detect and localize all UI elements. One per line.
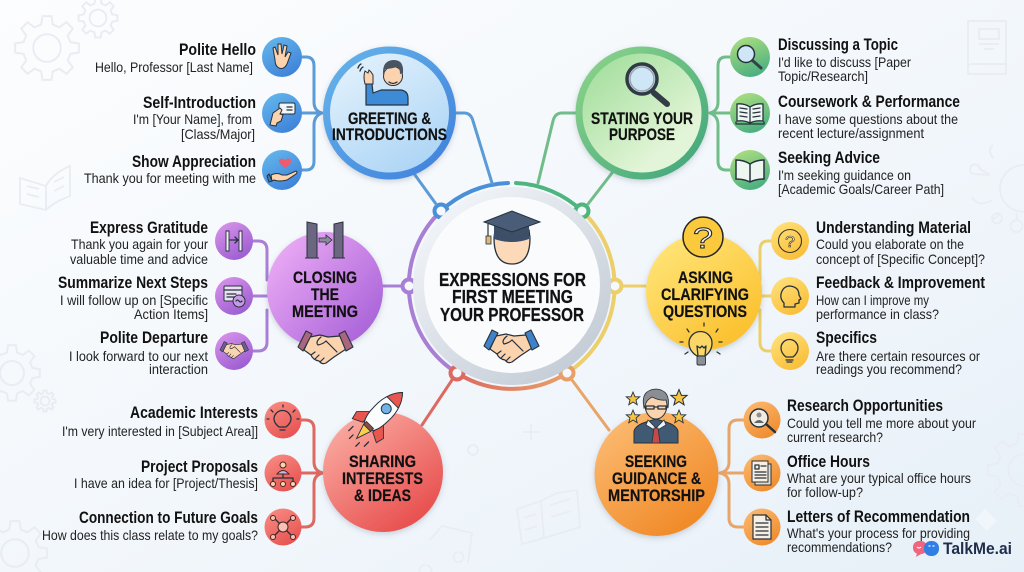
- item: understanding material: concept of [Specific Concept]?: [816, 251, 985, 267]
- item: specifics: readings you recommend?: [816, 361, 962, 377]
- item: feedback and improvement: How can I improve my: [816, 292, 929, 308]
- item: office hours: Office Hours: [787, 453, 870, 471]
- main circle: [646, 234, 762, 350]
- title: CLARIFYING: [661, 286, 749, 304]
- item: specifics: Are there certain resources or: [816, 348, 980, 364]
- item: research opportunities: current research?: [787, 429, 883, 445]
- item: letters of recommendation: What's your process for providing: [787, 525, 970, 541]
- item: project proposals: [74, 454, 302, 492]
- item: office hours: [744, 453, 971, 500]
- item: polite departure: I look forward to our next: [69, 348, 208, 364]
- item: self-introduction: I'm [Your Name], from: [133, 111, 252, 127]
- item: project proposals: I have an idea for [Project/Thesis]: [74, 475, 258, 491]
- connectors: [623, 241, 771, 351]
- item: express gratitude: Express Gratitude: [90, 219, 208, 237]
- item: feedback and improvement: performance in class?: [816, 306, 939, 322]
- item: academic interests: I'm very interested in [Subject Area]]: [62, 423, 258, 439]
- item: understanding material: Could you elaborate on the: [816, 236, 964, 252]
- item: show appreciation: Show Appreciation: [132, 153, 256, 171]
- main circle: [326, 50, 452, 176]
- item: seeking advice: [Academic Goals/Career Path]: [778, 181, 944, 197]
- item: office hours: What are your typical office hours: [787, 470, 971, 486]
- logo: TalkMe.ai: TalkMe.ai: [943, 539, 1012, 558]
- main circle: [323, 412, 443, 532]
- main circle: [579, 50, 705, 176]
- item: coursework and performance: I have some questions about the: [778, 111, 958, 127]
- item: coursework and performance: [730, 93, 960, 141]
- title: [608, 453, 705, 505]
- main circle: [267, 232, 383, 348]
- item: discussing a topic: Discussing a Topic: [778, 36, 898, 54]
- connectors: [253, 241, 401, 351]
- item: discussing a topic: Topic/Research]: [778, 68, 868, 84]
- item: academic interests: Academic Interests: [130, 404, 258, 422]
- title: [332, 110, 447, 144]
- item: office hours: for follow-up?: [787, 484, 863, 500]
- icon: rocket: [339, 379, 416, 456]
- item: connection to future goals: How does this class relate to my goals?: [42, 527, 258, 543]
- item: letters of recommendation: [744, 508, 970, 555]
- icon: question mark: [683, 217, 723, 257]
- connectors: [572, 380, 743, 527]
- item: express gratitude: valuable time and advice: [70, 251, 208, 267]
- item: self-introduction: [133, 93, 302, 142]
- item: discussing a topic: I'd like to discuss [Paper: [778, 54, 911, 70]
- item: polite departure: Polite Departure: [100, 329, 208, 347]
- item: feedback and improvement: Feedback & Improvement: [816, 274, 985, 292]
- item: polite hello: Hello, Professor [Last Name]: [95, 59, 253, 75]
- title: MENTORSHIP: [608, 487, 705, 505]
- item: discussing a topic: [730, 36, 911, 84]
- title: QUESTIONS: [663, 303, 747, 321]
- title: THE: [311, 286, 339, 304]
- item: understanding material: Understanding Material: [816, 219, 971, 237]
- main circle: [594, 412, 718, 536]
- hub title: YOUR PROFESSOR: [440, 305, 584, 325]
- item: connection to future goals: [42, 508, 302, 546]
- panel: asking clarifying questions: [623, 217, 985, 377]
- central ring with six nodes: [402, 183, 622, 389]
- panel: greeting and introductions: [84, 37, 492, 204]
- icon: graduate with cap: [484, 211, 540, 264]
- item: academic interests: [62, 402, 302, 439]
- title: & IDEAS: [354, 487, 411, 505]
- title: SEEKING: [625, 453, 687, 471]
- title: CLOSING: [293, 269, 357, 287]
- icon: doors and arrow: [305, 222, 345, 258]
- title: ASKING: [678, 269, 733, 287]
- title: SHARING: [349, 453, 416, 471]
- item: show appreciation: [84, 150, 302, 190]
- title: GREETING &: [348, 110, 431, 128]
- title: [342, 453, 423, 505]
- title: MEETING: [292, 303, 358, 321]
- item: seeking advice: [730, 149, 944, 197]
- item: coursework and performance: recent lecture/assignment: [778, 125, 924, 141]
- item: understanding material: [771, 219, 985, 267]
- item: research opportunities: Could you tell me more about your: [787, 415, 976, 431]
- item: connection to future goals: Connection to Future Goals: [79, 509, 258, 527]
- title: [292, 269, 358, 321]
- item: summarize next steps: Summarize Next Steps: [58, 274, 208, 292]
- item: polite hello: Polite Hello: [179, 41, 256, 59]
- item: specifics: [771, 329, 980, 377]
- item: self-introduction: [Class/Major]: [181, 126, 255, 142]
- logo: TalkMe.ai: [913, 509, 1012, 558]
- icon: magnifying glass: [627, 64, 667, 104]
- connectors: [302, 57, 492, 204]
- hub title: EXPRESSIONS FOR: [439, 270, 586, 290]
- title: [591, 110, 693, 144]
- title: INTRODUCTIONS: [332, 126, 447, 144]
- item: letters of recommendation: Letters of Recommendation: [787, 508, 970, 526]
- icon: question mark: ?: [693, 223, 713, 255]
- item: coursework and performance: Coursework & Performance: [778, 93, 960, 111]
- icon: light bulb: [680, 323, 722, 365]
- hub title: [439, 270, 586, 325]
- item: research opportunities: [744, 397, 976, 445]
- item: summarize next steps: [58, 274, 253, 322]
- icon: person waving: [358, 60, 408, 105]
- item: seeking advice: Seeking Advice: [778, 149, 880, 167]
- panel: sharing interests and ideas: [42, 379, 452, 546]
- title: PURPOSE: [609, 126, 675, 144]
- item: feedback and improvement: [771, 274, 985, 322]
- icon: handshake: [484, 330, 539, 363]
- connectors: [538, 57, 730, 204]
- title: STATING YOUR: [591, 110, 693, 128]
- item: polite departure: [69, 329, 253, 377]
- title: GUIDANCE &: [612, 470, 701, 488]
- item: summarize next steps: Action Items]: [134, 306, 208, 322]
- item: express gratitude: [70, 219, 253, 267]
- item: polite hello: [95, 37, 302, 77]
- title: [661, 269, 749, 321]
- connectors: [301, 380, 452, 527]
- icon: professor with stars: [626, 389, 687, 443]
- panel: seeking guidance and mentorship: [572, 380, 976, 555]
- panel: closing the meeting: [58, 219, 401, 377]
- panel: stating your purpose: [538, 36, 960, 204]
- item: project proposals: Project Proposals: [141, 458, 258, 476]
- title: INTERESTS: [342, 470, 423, 488]
- item: summarize next steps: I will follow up on [Specific: [60, 292, 208, 308]
- hub title: FIRST MEETING: [452, 287, 573, 307]
- item: research opportunities: Research Opportunities: [787, 397, 943, 415]
- item: show appreciation: Thank you for meeting with me: [84, 170, 256, 186]
- central hub: [413, 187, 611, 385]
- item: understanding material: ?: [785, 234, 795, 251]
- item: polite departure: interaction: [149, 361, 208, 377]
- item: specifics: Specifics: [816, 329, 877, 347]
- icon: handshake: [298, 331, 353, 364]
- item: seeking advice: I'm seeking guidance on: [778, 167, 911, 183]
- item: express gratitude: Thank you again for your: [71, 236, 208, 252]
- item: letters of recommendation: recommendations?: [787, 539, 892, 555]
- item: self-introduction: Self-Introduction: [143, 94, 256, 112]
